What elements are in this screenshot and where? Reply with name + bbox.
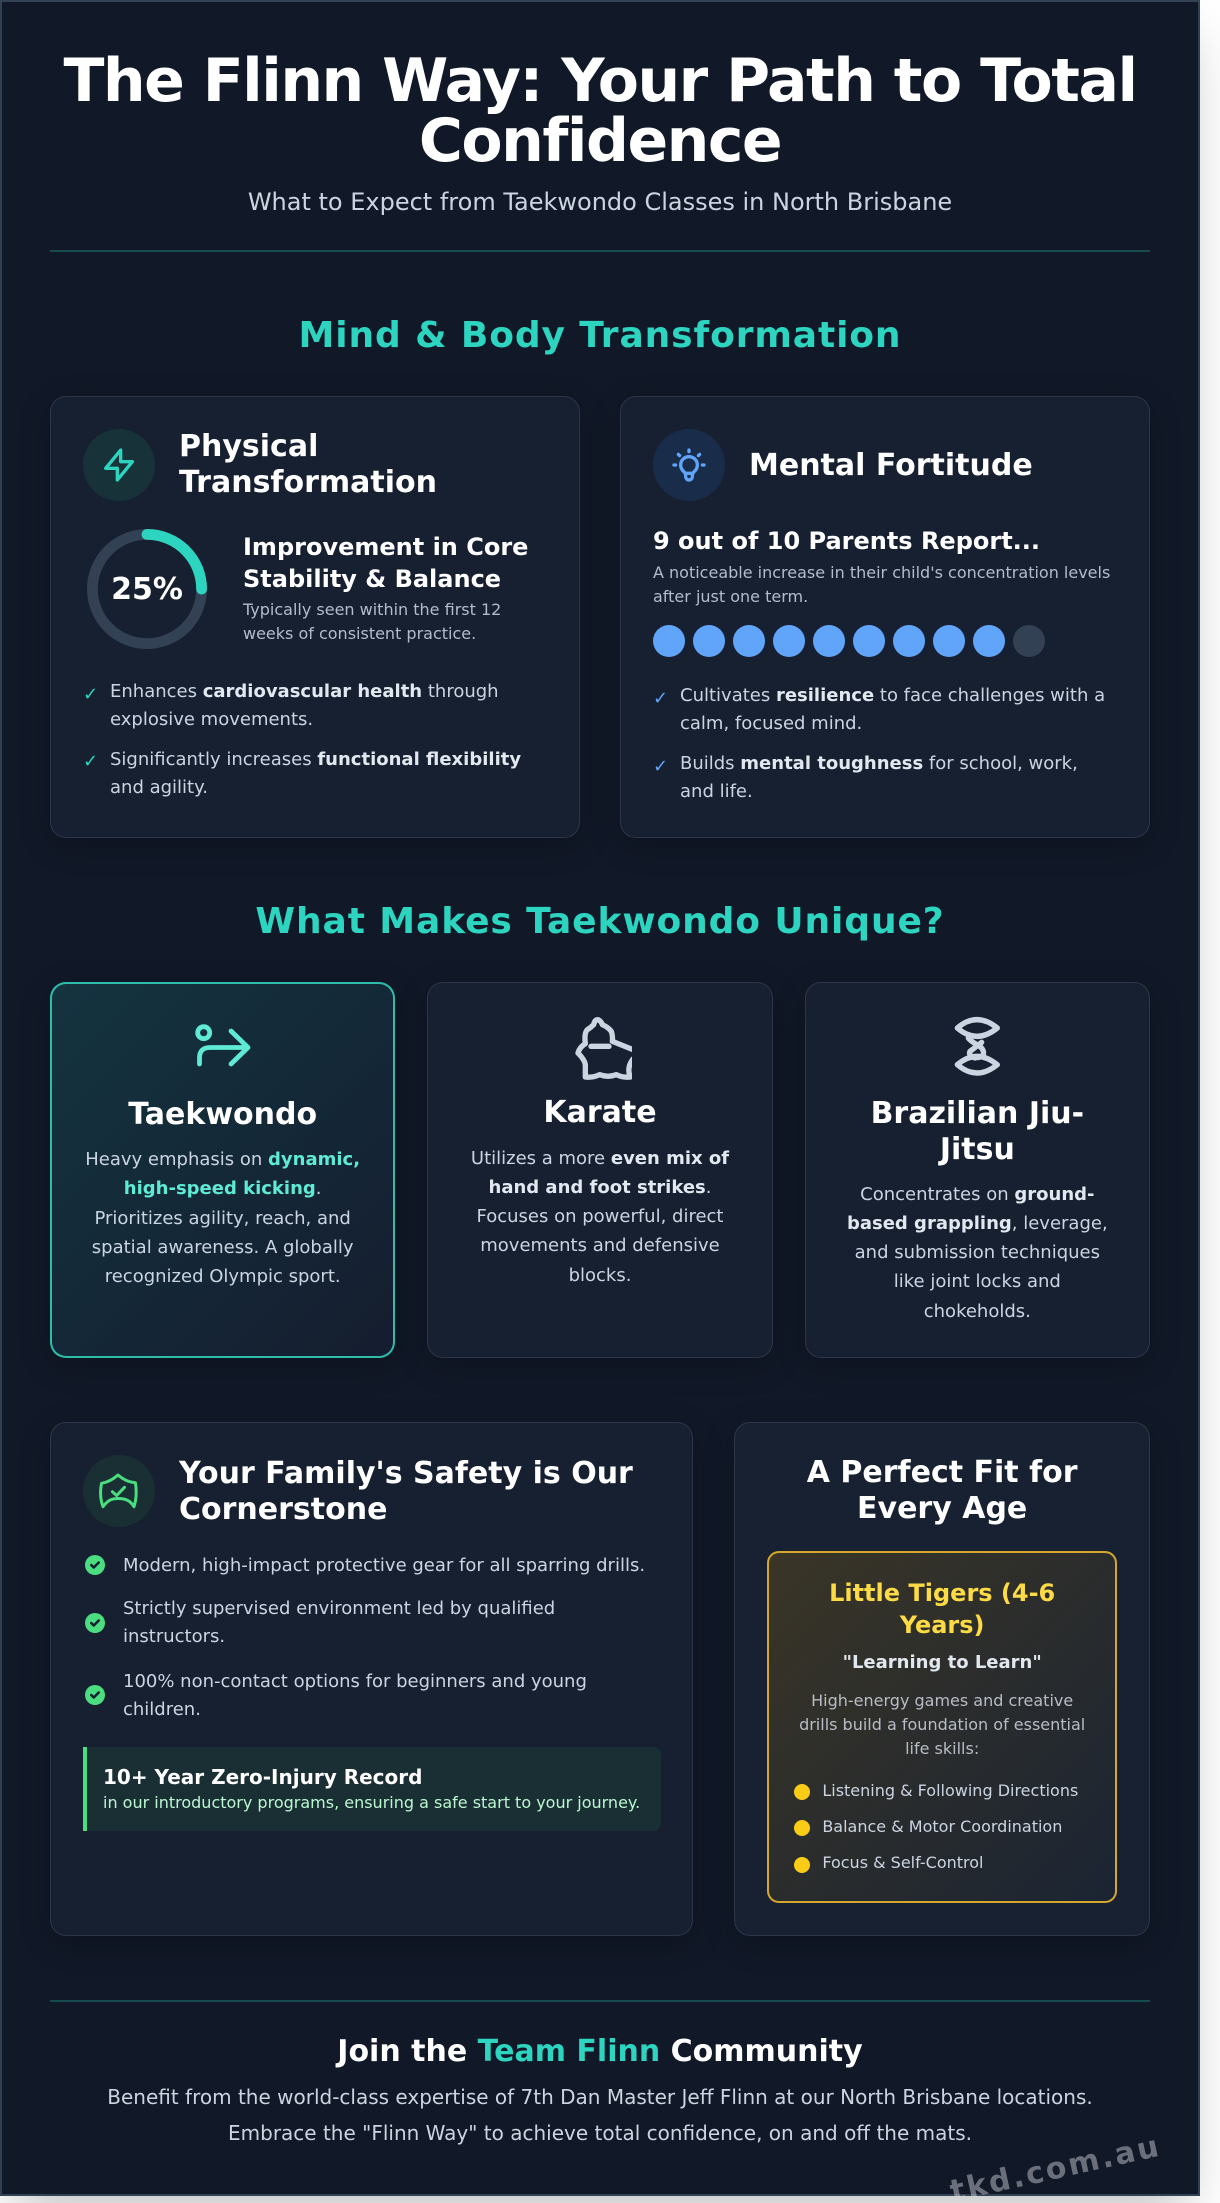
panel: brazilian jiu-jitsu <box>805 982 1150 1358</box>
safety item: gear: Modern, high-impact protective gear for all sparring drills. <box>123 1555 645 1576</box>
panel heading: A Perfect Fit for <box>807 1455 1078 1490</box>
bullet dot <box>794 1784 810 1800</box>
card text: Prioritizes agility, reach, and <box>94 1208 351 1228</box>
panel heading: Your Family's Safety is Our <box>179 1456 633 1490</box>
safety item: supervision: Strictly supervised environment led by qualified <box>123 1598 555 1619</box>
card text: blocks. <box>569 1264 631 1286</box>
stat note: weeks of consistent practice. <box>243 624 476 643</box>
donut chart: 25%: 25% <box>111 572 183 607</box>
bullet: resilience: calm, focused mind. <box>680 713 862 734</box>
bullet: cardio: explosive movements. <box>110 709 313 730</box>
bullet: cardio: Enhances cardiovascular health through <box>110 681 499 702</box>
skill: listening: Listening & Following Directions <box>822 1780 1078 1800</box>
subtitle: What to Expect from Taekwondo Classes in North Brisbane <box>248 188 952 216</box>
card heading: Brazilian Jiu- <box>871 1096 1084 1131</box>
safety item: non-contact: children. <box>123 1699 201 1720</box>
programme text: drills build a foundation of essential <box>799 1714 1085 1734</box>
panel: physical transformation <box>50 396 580 838</box>
programme tagline: "Learning to Learn" <box>843 1652 1042 1673</box>
card text <box>85 1149 360 1287</box>
skill: balance: Balance & Motor Coordination <box>822 1816 1062 1836</box>
stat heading: Improvement in Core <box>243 533 528 561</box>
stat note <box>653 562 1110 606</box>
bullet: flexibility: Significantly increases functional flexibility <box>110 748 521 770</box>
heading: unique: What Makes Taekwondo Unique? <box>255 900 945 942</box>
card text: movements and defensive <box>480 1235 720 1256</box>
bullet: toughness <box>680 753 1078 802</box>
card text: high-speed kicking. <box>124 1178 322 1199</box>
card text: Focuses on powerful, direct <box>476 1206 724 1227</box>
panel heading: Mental Fortitude <box>749 448 1033 483</box>
panel heading <box>806 1455 1078 1526</box>
icon: grappling knot <box>954 1016 1000 1076</box>
stat heading <box>243 533 528 593</box>
check mark: ✓ <box>653 688 668 709</box>
icon: kick arrow <box>195 1024 250 1066</box>
programme name: Years) <box>900 1611 985 1639</box>
programme text: High-energy games and creative <box>811 1690 1073 1710</box>
card heading <box>871 1096 1084 1167</box>
icon: light bulb <box>653 429 725 501</box>
panel heading <box>178 1456 633 1526</box>
bullet: flexibility <box>110 748 521 798</box>
safety item: non-contact: 100% non-contact options for beginners and young <box>123 1671 587 1692</box>
footer <box>50 2000 1150 2145</box>
card text <box>471 1148 730 1286</box>
title <box>63 46 1137 176</box>
bullet: flexibility: and agility. <box>110 776 208 798</box>
card text: Heavy emphasis on dynamic, <box>85 1149 360 1170</box>
panel: perfect fit <box>734 1422 1150 1936</box>
card heading: Taekwondo <box>128 1097 317 1132</box>
panel heading <box>179 429 437 500</box>
bullet: resilience <box>680 685 1105 734</box>
callout heading: 10+ Year Zero-Injury Record <box>103 1765 422 1789</box>
icon: check circle <box>85 1685 105 1705</box>
programme text <box>799 1690 1085 1758</box>
safety item: non-contact <box>123 1671 587 1720</box>
icon: shield <box>83 1455 155 1527</box>
bullet dot <box>794 1856 810 1872</box>
check mark: ✓ <box>653 756 668 777</box>
panel heading: Cornerstone <box>179 1492 387 1526</box>
footer text: Embrace the "Flinn Way" to achieve total confidence, on and off the mats. <box>228 2121 972 2145</box>
bullet: cardio <box>110 681 499 730</box>
donut chart: 25% <box>87 529 207 649</box>
bullet dot <box>794 1820 810 1836</box>
card text: like joint locks and <box>894 1271 1061 1292</box>
stat note: Typically seen within the first 12 <box>243 600 501 619</box>
icon: check circle <box>85 1613 105 1633</box>
icon: lightning bolt <box>83 429 155 501</box>
safety item: supervision: instructors. <box>123 1626 225 1647</box>
bullet: toughness: Builds mental toughness for school, work, <box>680 753 1078 774</box>
heading: mind and body: Mind & Body Transformation <box>299 315 901 356</box>
panel heading: Transformation <box>179 465 437 500</box>
card text: chokeholds. <box>924 1301 1031 1322</box>
programme name <box>829 1579 1055 1639</box>
footer text: Benefit from the world-class expertise of 7th Dan Master Jeff Flinn at our North Brisbane locations. <box>107 2085 1093 2109</box>
stat note <box>242 600 501 643</box>
panel heading: Physical <box>179 429 318 464</box>
footer text <box>107 2085 1093 2145</box>
panel: taekwondo <box>50 982 395 1358</box>
card text: and submission techniques <box>855 1242 1100 1263</box>
callout text: in our introductory programs, ensuring a safe start to your journey. <box>103 1792 640 1812</box>
safety item: supervision <box>123 1598 555 1647</box>
footer divider <box>50 2000 1150 2002</box>
stat heading: 9 out of 10 Parents Report... <box>653 527 1040 555</box>
skill: focus: Focus & Self-Control <box>822 1852 983 1872</box>
title: Confidence <box>419 106 781 176</box>
footer heading: Join the Team Flinn Community <box>337 2034 863 2069</box>
callout: zero-injury record <box>83 1747 661 1831</box>
programme card: little tigers <box>767 1551 1117 1902</box>
title: The Flinn Way: Your Path to Total <box>63 46 1137 116</box>
icon: check circle <box>85 1555 105 1575</box>
bullet: resilience: Cultivates resilience to face challenges with a <box>680 685 1105 706</box>
card heading: Karate <box>543 1095 657 1130</box>
card text: based grappling, leverage, <box>847 1213 1108 1234</box>
programme text: life skills: <box>905 1738 979 1758</box>
stat heading: Stability & Balance <box>243 565 501 593</box>
header divider <box>50 250 1150 252</box>
check mark: ✓ <box>83 751 98 772</box>
bullet: toughness: and life. <box>680 781 753 802</box>
stat note: A noticeable increase in their child's concentration levels <box>653 562 1110 582</box>
header <box>50 46 1150 252</box>
icon: karate figure <box>575 1017 632 1080</box>
check mark: ✓ <box>83 684 98 705</box>
card text: hand and foot strikes. <box>488 1177 711 1198</box>
card text: Concentrates on ground- <box>860 1184 1094 1205</box>
panel: safety <box>50 1422 693 1936</box>
stat note: after just one term. <box>653 586 808 606</box>
card text: recognized Olympic sport. <box>105 1266 341 1287</box>
card text <box>847 1184 1108 1322</box>
panel heading: Every Age <box>857 1491 1027 1526</box>
panel: mental fortitude <box>620 396 1150 838</box>
dot chart: 9 of 10 <box>653 625 1045 657</box>
programme name: Little Tigers (4-6 <box>829 1579 1055 1607</box>
panel: karate <box>427 982 773 1358</box>
card heading: Jitsu <box>940 1132 1015 1167</box>
card text: Utilizes a more even mix of <box>471 1148 729 1168</box>
card text: spatial awareness. A globally <box>92 1237 354 1258</box>
